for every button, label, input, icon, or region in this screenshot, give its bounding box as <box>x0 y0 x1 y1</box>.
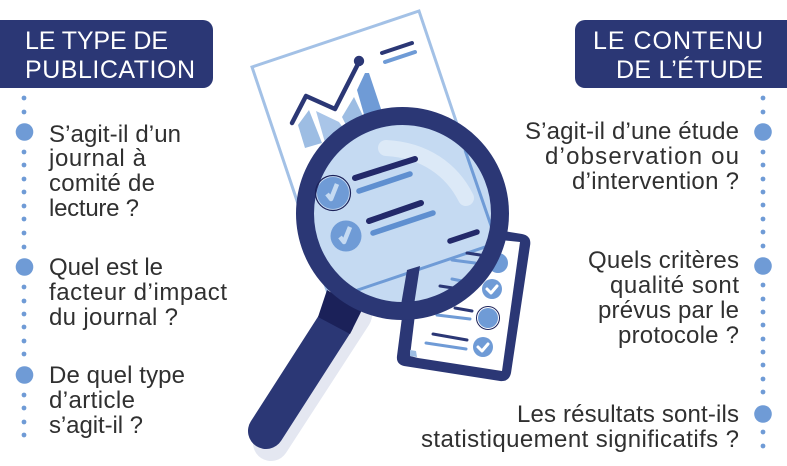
text: quality criteria question: qualité sont <box>610 272 739 299</box>
text: study type question: d’observation ou <box>545 143 739 170</box>
icon: report page with chart <box>252 11 497 299</box>
left dotted timeline <box>16 96 33 437</box>
text: significance question: statistiquement significatifs ? <box>421 426 739 453</box>
panel: type de publication header: PUBLICATION <box>25 56 195 84</box>
text: study type question: S’agit-il d’une étude <box>525 118 739 145</box>
text: significance question: Les résultats sont-ils <box>517 401 739 428</box>
text: quality criteria question <box>588 247 739 349</box>
text: quality criteria question: Quels critères <box>588 247 739 274</box>
text: impact factor question: facteur d’impact <box>49 279 227 306</box>
text: peer review question: journal à <box>48 145 147 172</box>
panel: type de publication header <box>0 20 213 88</box>
text: quality criteria question: prévus par le <box>598 297 739 324</box>
text: article type question: s’agit-il ? <box>49 412 143 439</box>
text: peer review question: S’agit-il d’un <box>49 121 181 148</box>
text: article type question: d’article <box>49 387 135 414</box>
text: peer review question <box>48 121 181 222</box>
icon: checklist clipboard <box>397 219 530 381</box>
handle neck <box>318 290 362 334</box>
panel: type de publication header: LE TYPE DE <box>25 27 168 55</box>
text: impact factor question: Quel est le <box>49 254 163 281</box>
text: impact factor question: du journal ? <box>49 304 178 331</box>
text: significance question <box>421 401 739 453</box>
right dotted timeline <box>754 96 772 448</box>
handle <box>266 322 336 431</box>
panel: contenu de l'étude header: LE CONTENU <box>593 27 763 55</box>
text: impact factor question <box>49 254 227 331</box>
lens ring <box>305 116 500 311</box>
text: study type question: d’intervention ? <box>572 168 739 195</box>
text: quality criteria question: protocole ? <box>618 322 739 349</box>
text: study type question <box>525 118 739 195</box>
icon: magnifying glass <box>266 116 500 443</box>
text: article type question: De quel type <box>49 362 185 389</box>
highlighted check badge <box>316 176 350 210</box>
text: peer review question: lecture ? <box>49 195 139 222</box>
panel: contenu de l'étude header: DE L’ÉTUDE <box>616 55 763 84</box>
text: peer review question: comité de <box>49 170 155 197</box>
lens <box>312 124 497 305</box>
handle shadow <box>271 315 354 443</box>
panel: contenu de l'étude header <box>575 20 787 88</box>
text: article type question <box>49 362 185 439</box>
